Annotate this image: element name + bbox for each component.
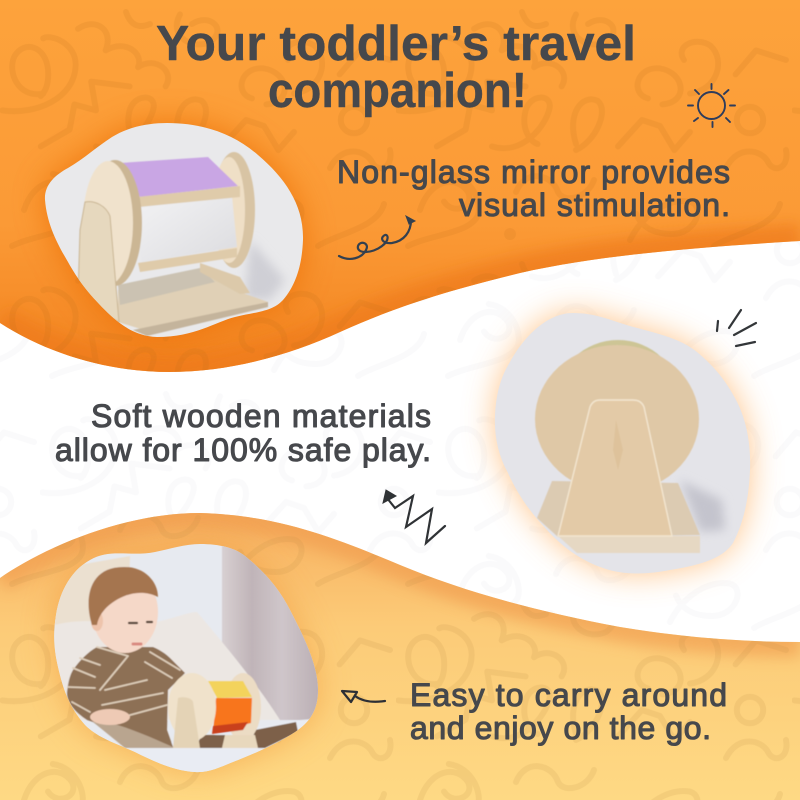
right stub upright xyxy=(200,263,250,294)
lavender top xyxy=(120,157,238,197)
panel: yellow bottom wave xyxy=(0,513,800,800)
text: easy to carry: Easy to carry around xyxy=(410,677,727,713)
text: soft wooden materials: allow for 100% safe play. xyxy=(55,432,431,468)
wooden disc xyxy=(535,345,699,493)
title: Your toddler’s travel xyxy=(156,17,636,71)
text: soft wooden materials xyxy=(55,398,431,468)
base plate xyxy=(118,278,268,329)
sweater stripes xyxy=(68,647,180,717)
bed xyxy=(124,718,310,772)
icon: zigzag arrow xyxy=(383,490,445,543)
toy orange face xyxy=(213,697,252,727)
base plate xyxy=(537,481,700,537)
left disc face xyxy=(83,161,133,285)
baby face xyxy=(129,622,152,623)
baby body xyxy=(67,647,185,747)
title xyxy=(156,17,636,118)
text: non-glass mirror xyxy=(337,154,730,223)
right disc xyxy=(223,152,256,268)
text: non-glass mirror: visual stimulation. xyxy=(459,187,730,223)
soft shadow under toy xyxy=(245,240,285,300)
text: easy to carry xyxy=(410,677,727,746)
icon: left arrow xyxy=(342,691,385,702)
left upright xyxy=(78,202,119,322)
mirror xyxy=(141,198,237,250)
pillow xyxy=(55,612,280,720)
icon: curly arrow xyxy=(339,216,415,259)
cast shadow xyxy=(680,480,725,532)
baby hand xyxy=(90,709,130,725)
left disc rim xyxy=(110,160,142,286)
text: non-glass mirror: Non-glass mirror provides xyxy=(337,154,730,190)
photo: spinning mirror toy xyxy=(40,118,310,343)
toy upright xyxy=(173,697,200,748)
photo: baby with toy xyxy=(50,540,325,780)
panel: orange top wave xyxy=(0,0,800,372)
icon: sun xyxy=(688,84,735,127)
curtain xyxy=(222,545,322,720)
icon: spark lines xyxy=(717,310,756,346)
title: companion! xyxy=(268,64,527,118)
text: easy to carry: and enjoy on the go. xyxy=(410,710,711,746)
toy right disc xyxy=(225,673,261,741)
green drum behind xyxy=(579,340,660,356)
toy stand xyxy=(222,735,258,748)
toy yellow face xyxy=(208,681,252,698)
toy left disc xyxy=(168,673,216,741)
glow behind wooden back photo xyxy=(495,313,750,574)
photo: wooden back view xyxy=(490,308,755,578)
baby head xyxy=(96,592,158,654)
trapezoid upright xyxy=(558,400,672,536)
beige wall xyxy=(50,556,130,625)
baby legs xyxy=(93,721,175,748)
wood bands xyxy=(137,186,240,207)
text: soft wooden materials: Soft wooden materials xyxy=(91,398,431,434)
baby hair xyxy=(89,567,158,625)
